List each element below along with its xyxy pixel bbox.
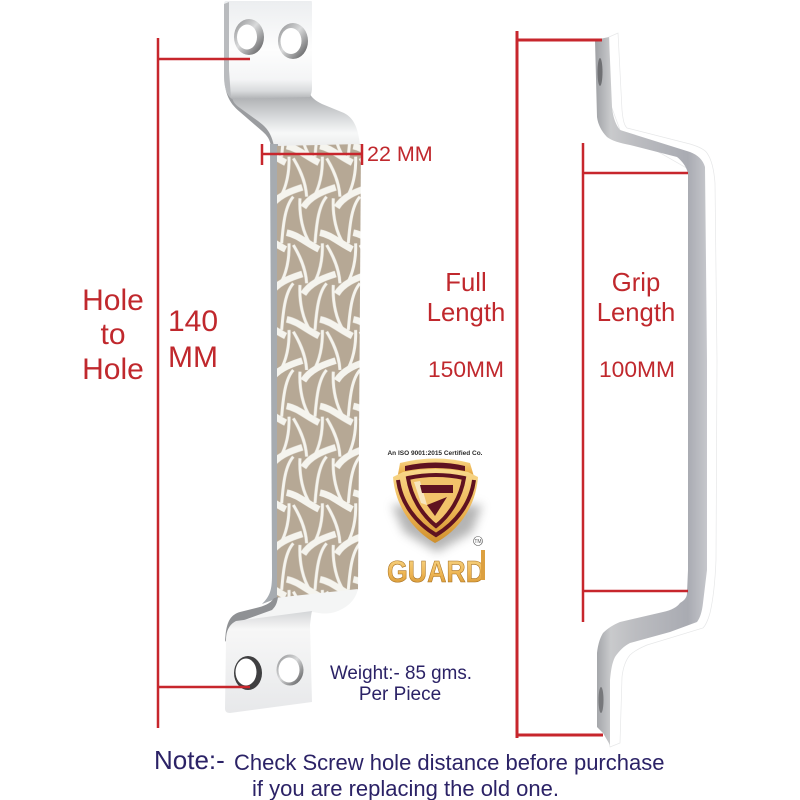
weight note: Weight:- 85 gms. <box>330 663 472 684</box>
label: full length: Full <box>445 269 487 297</box>
grip length dimension line <box>583 143 688 622</box>
label: 22 MM: 22 MM <box>367 142 433 166</box>
top bend <box>232 94 360 146</box>
top mounting plate <box>224 1 312 99</box>
grip side edge <box>262 144 278 604</box>
label: hole to hole: to <box>100 318 126 351</box>
trademark mark: TM <box>474 539 482 545</box>
label: full length: Length <box>427 299 505 327</box>
label: 140 MM: MM <box>168 341 218 374</box>
label: 140 MM: 140 <box>168 305 218 338</box>
ISO certification line: An ISO 9001:2015 Certified Co. <box>387 450 483 457</box>
bottom hole right <box>276 654 304 686</box>
label: hole to hole: Hole <box>82 353 144 386</box>
side white edge <box>600 33 717 747</box>
purchase note: Note:- <box>154 745 225 775</box>
shield shadow <box>392 505 482 552</box>
wordmark D ascender <box>481 550 485 580</box>
width dimension bracket <box>262 144 362 165</box>
weight note second line: Per Piece <box>359 684 441 705</box>
top screw hole shading <box>598 58 602 86</box>
right handle side view <box>595 33 717 747</box>
label: 150MM: 150MM <box>428 357 504 382</box>
logo: S Guard shield <box>387 450 485 589</box>
label: 100MM: 100MM <box>599 357 675 382</box>
top bend shadow edge <box>224 70 290 150</box>
top hole right <box>278 23 308 59</box>
bottom bend <box>236 589 358 622</box>
label: grip length: Length <box>597 299 675 327</box>
shield emblem <box>393 458 478 543</box>
grip patterned face <box>277 144 361 598</box>
side grey face <box>595 37 707 745</box>
full length dimension line <box>517 31 603 738</box>
hole to hole dimension line <box>158 38 250 728</box>
bottom hole left <box>234 656 262 690</box>
top hole left <box>234 19 264 55</box>
bottom screw hole shading <box>598 687 604 713</box>
label: grip length: Grip <box>612 269 660 297</box>
purchase note: Check Screw hole distance before purchase <box>234 750 664 775</box>
label: hole to hole: Hole <box>82 284 144 317</box>
wordmark GUARD: GUARD <box>387 554 485 589</box>
bottom mounting plate <box>225 611 312 713</box>
left handle <box>224 1 361 713</box>
